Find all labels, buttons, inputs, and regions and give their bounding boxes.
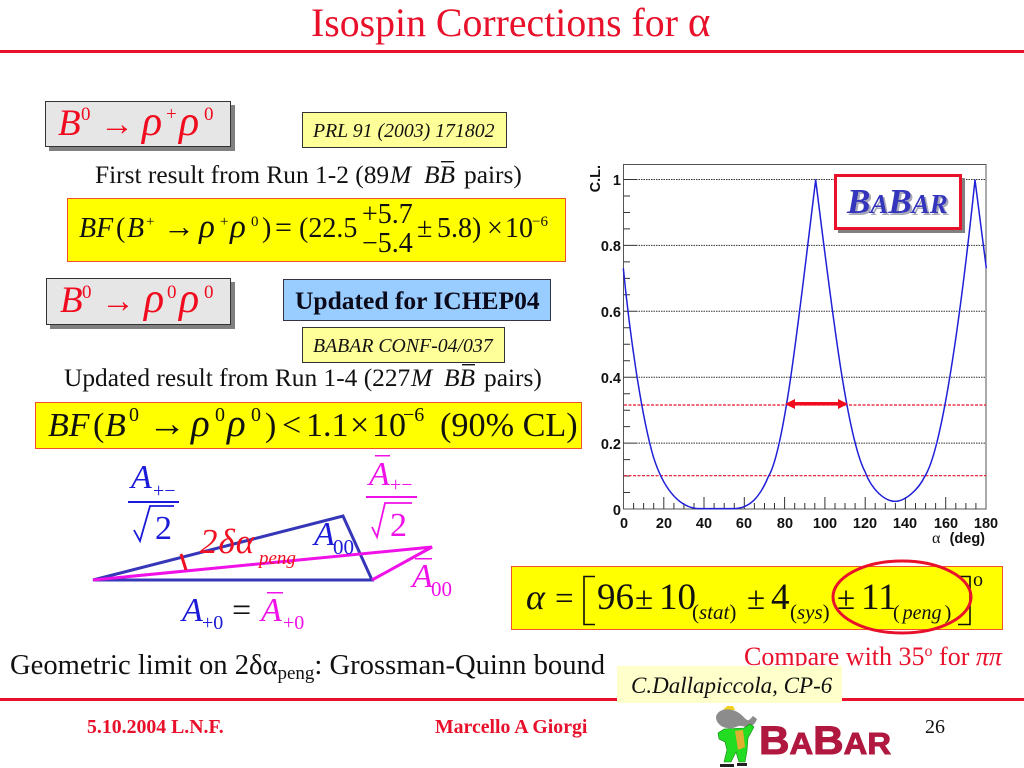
formula box: BF B+ to rho+ rho0: −5.4 <box>362 228 413 259</box>
x axis labels: 0 <box>620 516 628 532</box>
text: updated result: BB <box>444 364 475 392</box>
result box: alpha value: 11 <box>861 577 897 618</box>
formula box: BF B+ to rho+ rho0: (22.5 <box>299 213 357 244</box>
angle tick <box>181 554 186 570</box>
label: A+0 equals A-bar+0: = <box>232 592 251 629</box>
formula box: BF B0 to rho0 rho0: BF <box>48 407 91 444</box>
title: Isospin Corrections for α <box>311 0 710 46</box>
formula box: BF B+ to rho+ rho0: 10 <box>505 213 533 244</box>
label: A+0 equals A-bar+0 <box>180 592 304 634</box>
text: geometric limit: : Grossman-Quinn bound <box>314 650 605 681</box>
result box: alpha value: o <box>973 569 983 591</box>
footer: page number: 26 <box>925 716 945 738</box>
axis titles: (deg) <box>950 531 985 547</box>
BABAR badge in chart: BABAR <box>848 184 950 223</box>
y axis labels: 0.4 <box>601 371 621 387</box>
result box: alpha value: α <box>526 577 546 617</box>
magenta triangle <box>93 547 432 580</box>
decay label: B0 to rho0 rho0: B <box>60 280 83 321</box>
formula box: BF B0 to rho0 rho0: (90% CL) <box>440 407 578 444</box>
decay label: B0 to rho+ rho0: B <box>58 103 81 144</box>
decay label: B0 to rho+ rho0: ρ <box>140 99 162 145</box>
y axis labels: 1 <box>613 173 621 189</box>
curve <box>623 180 986 509</box>
formula box: BF B0 to rho0 rho0: ρ <box>226 402 246 445</box>
result box: alpha value: 96 <box>597 577 634 618</box>
x axis labels <box>620 516 998 532</box>
formula box: BF B+ to rho+ rho0: + <box>146 214 154 230</box>
badge: updated for ICHEP04: Updated for ICHEP04 <box>295 286 540 315</box>
label: A00 <box>312 516 354 559</box>
formula box: BF B+ to rho+ rho0: BF <box>79 213 114 244</box>
label: A-bar+- over root 2: A <box>367 456 390 493</box>
decay label: B0 to rho0 rho0: 0 <box>82 282 92 303</box>
text: updated result: pairs) <box>484 364 542 392</box>
formula box: BF B0 to rho0 rho0: → <box>148 403 186 445</box>
result box: alpha value: 4 <box>771 577 790 618</box>
x axis labels: 20 <box>656 516 672 532</box>
y axis labels: 0 <box>613 503 621 519</box>
citation box: C.Dallapiccola, CP-6 <box>631 673 833 698</box>
x axis labels: 80 <box>777 516 793 532</box>
result box: alpha value: 10 <box>659 577 696 618</box>
label: A-bar 00 <box>410 558 452 601</box>
result box: alpha value <box>512 566 1002 630</box>
formula box: BF B0 to rho0 rho0: −6 <box>403 404 424 426</box>
text: first result: M <box>389 161 413 189</box>
red confidence lines <box>624 405 986 476</box>
label: A-bar+- over root 2 <box>366 455 417 544</box>
y axis labels: 0.6 <box>601 305 621 321</box>
label: 2 delta alpha peng: 2δα <box>200 522 255 561</box>
logo: elephant and BABAR <box>716 706 891 767</box>
label: A+0 equals A-bar+0: +0 <box>283 612 304 634</box>
red ellipse highlight <box>833 561 971 633</box>
isospin triangle diagram <box>93 455 452 634</box>
BABAR badge in chart: BABAR <box>846 182 948 221</box>
text: first result: BB <box>424 161 455 189</box>
text: first result <box>95 161 522 189</box>
formula box: BF B+ to rho+ rho0: ± <box>417 213 432 244</box>
formula box: BF B+ to rho+ rho0: 5.8) <box>437 213 481 244</box>
formula box: BF B+ to rho+ rho0: + <box>220 214 228 230</box>
result box: alpha value: (stat) <box>692 600 736 624</box>
text: first result: pairs) <box>464 161 522 189</box>
y axis labels: 0.2 <box>601 437 621 453</box>
label: A+0 equals A-bar+0: A <box>180 592 203 629</box>
logo: elephant and BABAR: BABAR <box>759 719 891 763</box>
x axis labels: 140 <box>893 516 917 532</box>
reference box: PRL: PRL 91 (2003) 171802 <box>312 120 495 142</box>
result box: alpha value: (peng) <box>893 602 951 624</box>
formula box: BF B+ to rho+ rho0: −6 <box>532 214 548 230</box>
label: A00: A <box>312 516 335 553</box>
decay label: B0 to rho+ rho0: + <box>166 104 177 125</box>
y axis labels: 0.8 <box>601 239 621 255</box>
label: A-bar+- over root 2: +− <box>390 474 413 496</box>
formula box: BF B0 to rho0 rho0: 10 <box>372 407 406 444</box>
text: geometric limit: peng <box>277 663 315 684</box>
formula box: BF B+ to rho+ rho0: → <box>163 208 195 244</box>
formula box: BF B+ to rho+ rho0 <box>68 198 566 262</box>
result box: alpha value: ± <box>837 581 855 617</box>
BABAR badge in chart <box>836 176 965 233</box>
badge: updated for ICHEP04 <box>284 280 550 320</box>
result box: alpha value: = <box>555 581 574 617</box>
chart: C.L. versus alpha <box>588 164 998 547</box>
axis titles: C.L. <box>588 165 604 192</box>
result box: alpha value: ± <box>635 581 653 617</box>
formula box: BF B0 to rho0 rho0: 1.1 <box>306 407 348 444</box>
label: A+- over root 2: 2 <box>155 510 172 547</box>
reference box: BABAR CONF <box>302 328 504 362</box>
formula box: BF B0 to rho0 rho0: ( <box>93 407 104 444</box>
elephant <box>716 706 757 767</box>
formula box: BF B0 to rho0 rho0: 0 <box>129 404 139 426</box>
text: compare with 35 deg: o <box>925 643 933 660</box>
x axis labels: 180 <box>974 516 998 532</box>
formula box: BF B+ to rho+ rho0: 0 <box>251 214 258 230</box>
decay label: B0 to rho0 rho0: 0 <box>167 282 176 303</box>
formula box: BF B0 to rho0 rho0: 0 <box>215 404 225 426</box>
x axis labels: 120 <box>853 516 877 532</box>
result box: alpha value: ± <box>747 581 765 617</box>
title <box>0 0 1024 53</box>
decay label: B0 to rho+ rho0 <box>46 99 235 151</box>
formula box: BF B+ to rho+ rho0: ( <box>116 213 125 244</box>
formula box: BF B0 to rho0 rho0: ) <box>265 407 276 444</box>
label: A+0 equals A-bar+0: A <box>259 592 282 629</box>
label: A-bar+- over root 2: 2 <box>390 507 407 544</box>
label: A-bar 00: A <box>410 558 433 595</box>
formula box: BF B0 to rho0 rho0: < <box>282 407 301 444</box>
axis titles: α <box>932 530 941 547</box>
x axis labels: 40 <box>696 516 712 532</box>
y axis labels <box>601 173 621 519</box>
label: A+- over root 2: +− <box>153 480 176 502</box>
decay label: B0 to rho+ rho0: 0 <box>204 104 214 125</box>
text: first result: First result from Run 1-2 (89 <box>95 161 389 189</box>
formula box: BF B+ to rho+ rho0: ρ <box>229 209 246 245</box>
formula box: BF B+ to rho+ rho0: +5.7 <box>362 199 413 230</box>
formula box: BF B+ to rho+ rho0: ρ <box>198 209 215 245</box>
formula box: BF B0 to rho0 rho0: B <box>105 407 126 444</box>
decay label: B0 to rho+ rho0: → <box>100 106 134 143</box>
label: A00: 00 <box>333 535 354 559</box>
citation box <box>617 666 842 703</box>
text: compare with 35 deg: Compare with 35 <box>744 642 925 671</box>
formula box: BF B0 to rho0 rho0 <box>36 402 582 448</box>
footer rule <box>0 698 1024 701</box>
result box: alpha value: (sys) <box>790 600 830 624</box>
text: compare with 35 deg: for <box>933 642 976 671</box>
decay label: B0 to rho0 rho0 <box>46 276 235 329</box>
formula box: BF B0 to rho0 rho0: ρ <box>190 402 210 445</box>
text: geometric limit: Geometric limit on 2δα <box>10 650 277 681</box>
text: compare with 35 deg: ππ <box>976 642 1003 671</box>
x axis labels: 100 <box>813 516 837 532</box>
reference box: BABAR CONF: BABAR CONF-04/037 <box>313 335 494 357</box>
label: A+0 equals A-bar+0: +0 <box>202 612 223 634</box>
axis titles <box>588 165 985 547</box>
formula box: BF B+ to rho+ rho0: B <box>127 213 144 244</box>
double arrow <box>785 399 848 409</box>
text: updated result: Updated result from Run 1-4 (227 <box>64 364 410 392</box>
formula box: BF B0 to rho0 rho0: 0 <box>251 404 261 426</box>
reference box: PRL <box>302 112 506 148</box>
decay label: B0 to rho0 rho0: ρ <box>142 276 164 322</box>
text: updated result: M <box>410 364 434 392</box>
footer: author: Marcello A Giorgi <box>435 716 588 738</box>
decay label: B0 to rho0 rho0: 0 <box>204 282 214 303</box>
footer: date: 5.10.2004 L.N.F. <box>87 716 224 738</box>
label: 2 delta alpha peng <box>200 522 296 569</box>
label: A+- over root 2 <box>128 459 179 547</box>
label: A+- over root 2: A <box>129 459 152 496</box>
decay label: B0 to rho0 rho0: ρ <box>177 276 199 322</box>
formula box: BF B+ to rho+ rho0: × <box>487 213 503 244</box>
decay label: B0 to rho+ rho0: 0 <box>81 104 90 125</box>
decay label: B0 to rho0 rho0: → <box>101 283 135 320</box>
x axis labels: 60 <box>736 516 752 532</box>
formula box: BF B+ to rho+ rho0: = <box>275 211 292 244</box>
decay label: B0 to rho+ rho0: ρ <box>177 99 199 145</box>
label: A-bar 00: 00 <box>431 577 452 601</box>
blue triangle <box>93 516 372 580</box>
formula box: BF B0 to rho0 rho0: × <box>350 407 369 444</box>
label: 2 delta alpha peng: peng <box>257 548 296 569</box>
x axis labels: 160 <box>934 516 958 532</box>
formula box: BF B+ to rho+ rho0: ) <box>262 213 271 244</box>
